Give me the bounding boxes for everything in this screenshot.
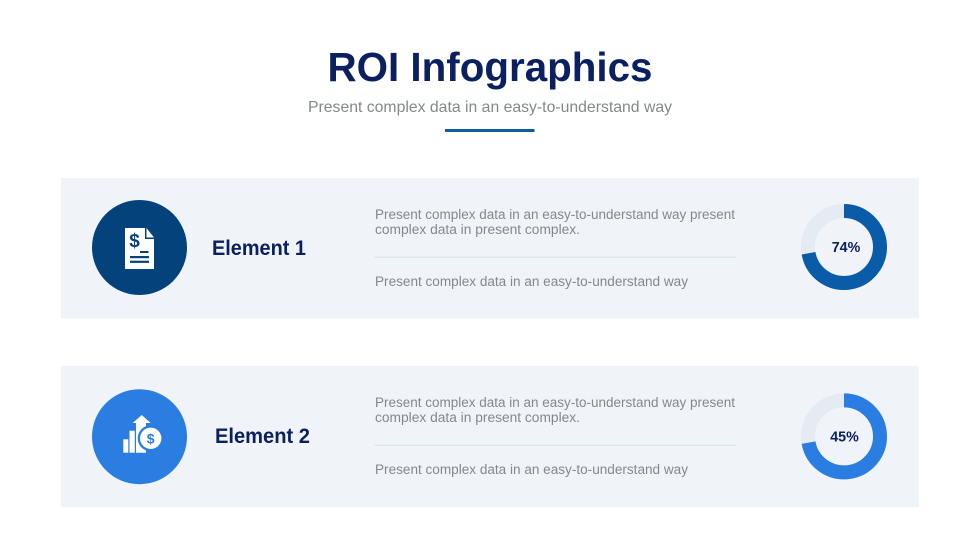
donut chart: 45%: 45% bbox=[830, 430, 859, 446]
title: ROI Infographics bbox=[328, 44, 652, 90]
description: element 2 bbox=[375, 395, 735, 425]
heading: element 1: Element 1 bbox=[212, 237, 306, 260]
donut chart: 74%: 74% bbox=[832, 240, 860, 256]
icon: growth and dollar coin: $ bbox=[147, 430, 155, 446]
heading: element 2: Element 2 bbox=[215, 425, 310, 448]
description: element 1: Present complex data in an easy-to-understand way present bbox=[375, 207, 735, 222]
note: element 1: Present complex data in an easy-to-understand way bbox=[375, 274, 688, 289]
subtitle: Present complex data in an easy-to-understand way bbox=[308, 99, 672, 116]
description: element 2: complex data in present complex. bbox=[375, 410, 580, 425]
icon: dollar document: $ bbox=[129, 231, 140, 252]
description: element 1 bbox=[375, 207, 735, 237]
panel: element 2 bbox=[61, 366, 919, 507]
donut chart: 74% bbox=[808, 211, 880, 283]
description: element 1: complex data in present complex. bbox=[375, 222, 580, 237]
note: element 2: Present complex data in an easy-to-understand way bbox=[375, 462, 688, 477]
panel: element 1 bbox=[61, 178, 919, 318]
title underline bbox=[445, 129, 534, 132]
donut chart: 45% bbox=[808, 400, 880, 472]
icon: growth and dollar coin bbox=[92, 389, 187, 484]
icon: dollar document bbox=[92, 200, 187, 295]
description: element 2: Present complex data in an easy-to-understand way present bbox=[375, 395, 735, 410]
